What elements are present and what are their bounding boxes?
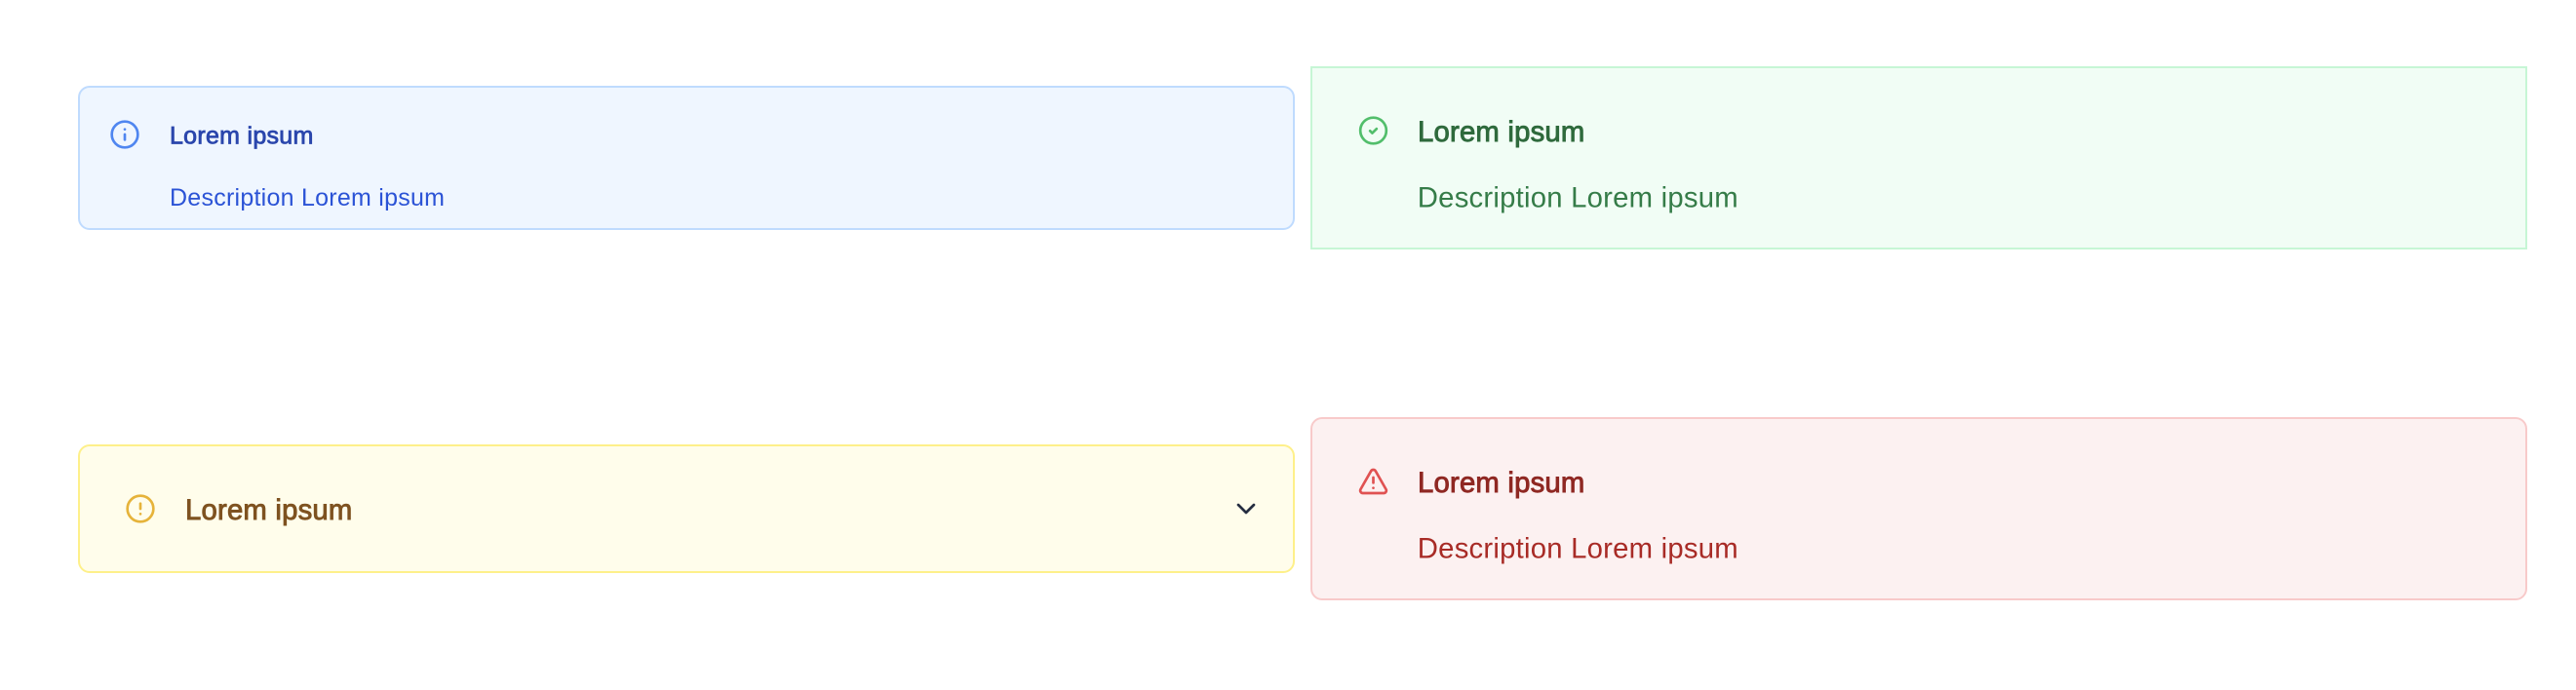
panel: error alert (1311, 418, 2526, 599)
panel: success alert (1311, 67, 2526, 249)
icon: warning triangle (1360, 470, 1386, 493)
icon: chevron down (1238, 505, 1254, 513)
icon: warning circle (128, 496, 153, 521)
heading: info title: Lorem ipsum (170, 122, 314, 149)
heading: success title: Lorem ipsum (1418, 116, 1585, 148)
text: success description: Description Lorem ipsum (1418, 182, 1738, 214)
heading: warning title: Lorem ipsum (185, 494, 353, 526)
text: info description: Description Lorem ipsum (170, 184, 445, 211)
heading: error title: Lorem ipsum (1418, 467, 1585, 499)
panel: warning alert (79, 445, 1294, 572)
icon: info (112, 122, 137, 147)
text: error description: Description Lorem ipsum (1418, 533, 1738, 565)
panel: info alert (79, 87, 1294, 229)
icon: check circle (1360, 118, 1386, 143)
